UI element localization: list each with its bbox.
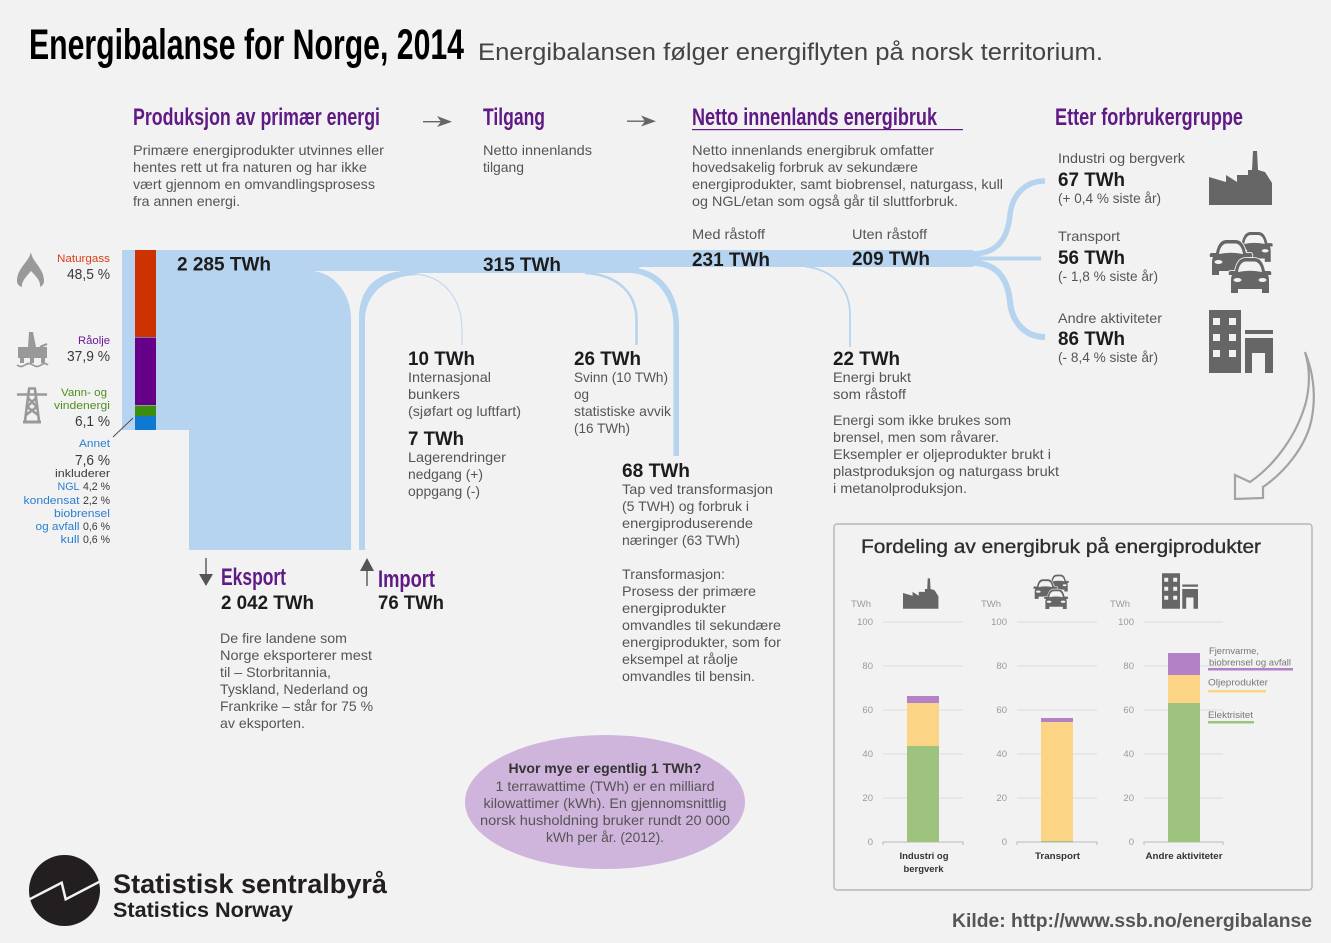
chart: industry: 60 <box>862 705 873 716</box>
flow values on band: Med råstoff <box>692 226 765 242</box>
text block: transformation losses: Transformasjon: <box>622 566 725 582</box>
panel: export: Norge eksporterer mest <box>220 647 372 663</box>
text block: losses and statistical differences: Svinn (10 TWh) <box>574 369 668 385</box>
panel: import: Import <box>378 566 435 593</box>
arrow: production to supply <box>423 116 452 127</box>
text block: raw material use: Energi som ikke brukes som <box>833 412 1011 428</box>
text block: transformation losses <box>622 460 781 684</box>
labels: energy sources: 7,6 % <box>75 453 110 469</box>
chart: transport: TWh <box>981 599 1001 610</box>
sankey flow diagram <box>122 181 1045 550</box>
panel: net domestic energy use heading and text: Netto innenlands energibruk <box>692 104 937 131</box>
text block: raw material use: Energi brukt <box>833 369 911 385</box>
consumer group: industry <box>1058 150 1186 206</box>
callout: what is 1 TWh: kilowattimer (kWh). En gjennomsnittlig <box>484 795 726 811</box>
panel: production heading and text: fra annen energi. <box>133 193 240 209</box>
consumer group: industry: Industri og bergverk <box>1058 150 1186 166</box>
panel: import: 76 TWh <box>378 592 444 614</box>
chart: other activities: Andre aktiviteter <box>1146 851 1223 862</box>
flow values on band: 315 TWh <box>483 254 561 276</box>
text block: transformation losses: omvandles til sekundære <box>622 617 781 633</box>
chart: other activities: 80 <box>1123 661 1134 672</box>
panel: export <box>199 558 373 731</box>
panel: supply heading and text: tilgang <box>483 159 524 175</box>
text block: international bunkers and stock changes <box>408 348 521 499</box>
consumer group: transport: (- 1,8 % siste år) <box>1058 268 1158 284</box>
text block: raw material use: som råstoff <box>833 386 906 402</box>
logo: Statistics Norway: Statistics Norway <box>113 899 293 922</box>
panel: export: Tyskland, Nederland og <box>220 681 368 697</box>
consumer group: transport: Transport <box>1058 228 1120 244</box>
labels: energy sources: 48,5 % <box>67 267 110 283</box>
labels: energy sources: Råolje <box>78 335 110 347</box>
text block: international bunkers and stock changes: 7 TWh <box>408 428 464 450</box>
chart: industry: 20 <box>862 793 873 804</box>
chart: industry: 40 <box>862 749 873 760</box>
chart: other activities: 60 <box>1123 705 1134 716</box>
text block: transformation losses: næringer (63 TWh) <box>622 532 740 548</box>
chart: transport: 60 <box>996 705 1007 716</box>
panel: export: 2 042 TWh <box>221 592 314 614</box>
panel: import <box>360 558 444 614</box>
panel: net domestic energy use heading and text: og NGL/etan som også går til sluttforbruk. <box>692 193 958 209</box>
labels: energy sources: NGL <box>58 481 80 493</box>
icon: flame <box>17 252 44 287</box>
labels: energy sources: 0,6 % <box>83 521 110 533</box>
chart: industry: 100 <box>857 617 873 628</box>
chart title: Fordeling av energibruk på energiprodukter <box>861 536 1262 558</box>
chart: transport: Transport <box>1035 851 1081 862</box>
chart: industry: TWh <box>851 599 871 610</box>
panel: supply heading and text: Netto innenlands <box>483 142 592 158</box>
chart legend: Elektrisitet <box>1208 710 1253 721</box>
icon: cars <box>1210 232 1273 293</box>
title: Energibalanse for Norge, 2014 <box>29 21 464 69</box>
flow values on band <box>177 226 930 276</box>
logo: Statistics Norway: Statistisk sentralbyrå <box>113 869 388 899</box>
text block: international bunkers and stock changes: (sjøfart og luftfart) <box>408 403 521 419</box>
chart: industry: Industri og <box>900 851 949 862</box>
text block: losses and statistical differences: statistiske avvik <box>574 403 672 419</box>
text block: losses and statistical differences: og <box>574 386 589 402</box>
text block: raw material use: plastproduksjon og naturgass brukt <box>833 463 1059 479</box>
logo: Statistics Norway <box>29 855 388 926</box>
panel: net domestic energy use heading and text: Netto innenlands energibruk omfatter <box>692 142 934 158</box>
panel: net domestic energy use heading and text: energiprodukter, samt biobrensel, naturgass, kull <box>692 176 1003 192</box>
labels: energy sources: 37,9 % <box>67 349 110 365</box>
labels: energy sources: 0,6 % <box>83 534 110 546</box>
consumer group: industry: 67 TWh <box>1058 169 1125 191</box>
heading: by consumer group: Etter forbrukergruppe <box>1055 104 1243 131</box>
panel: export: Frankrike – står for 75 % <box>220 698 373 714</box>
chart legend: biobrensel og avfall <box>1209 658 1291 668</box>
text block: raw material use: 22 TWh <box>833 348 900 370</box>
panel: production heading and text <box>133 104 384 209</box>
text block: losses and statistical differences: (16 TWh) <box>574 420 630 436</box>
text block: transformation losses: Prosess der primære <box>622 583 756 599</box>
text block: raw material use <box>833 348 1059 496</box>
callout: what is 1 TWh: norsk husholdning bruker rundt 20 000 <box>480 812 730 828</box>
labels: energy sources: inkluderer <box>55 468 110 480</box>
text block: losses and statistical differences <box>574 348 672 436</box>
text block: transformation losses: eksempel at råolje <box>622 651 738 667</box>
panel: production heading and text: hentes rett ut fra naturen og har ikke <box>133 159 367 175</box>
chart: transport: 0 <box>1002 837 1007 848</box>
text block: losses and statistical differences: 26 TWh <box>574 348 641 370</box>
chart: industry: 0 <box>868 837 873 848</box>
panel: production heading and text: Primære energiprodukter utvinnes eller <box>133 142 384 158</box>
source line: Kilde: http://www.ssb.no/energibalanse <box>952 911 1312 932</box>
consumer group: industry: (+ 0,4 % siste år) <box>1058 190 1161 206</box>
labels: energy sources: 4,2 % <box>83 481 110 493</box>
chart: other activities <box>1110 573 1223 862</box>
labels: energy sources: vindenergi <box>54 400 110 412</box>
panel: supply heading and text <box>483 104 592 175</box>
chart: other activities: 100 <box>1118 617 1134 628</box>
text block: transformation losses: (5 TWH) og forbruk i <box>622 498 749 514</box>
labels: energy sources: biobrensel <box>54 508 110 520</box>
labels: energy sources: Vann- og <box>61 387 107 399</box>
panel: net domestic energy use heading and text <box>692 104 1003 209</box>
labels: energy sources: og avfall <box>36 521 80 533</box>
callout: what is 1 TWh: 1 terrawattime (TWh) er en milliard <box>496 778 714 794</box>
consumer group: other activities: (- 8,4 % siste år) <box>1058 349 1158 365</box>
text block: transformation losses: 68 TWh <box>622 460 690 482</box>
chart: other activities: 40 <box>1123 749 1134 760</box>
text block: raw material use: Eksempler er oljeprodukter brukt i <box>833 446 1051 462</box>
text block: international bunkers and stock changes: Internasjonal <box>408 369 491 385</box>
arrow: supply to net use <box>627 116 656 126</box>
text block: raw material use: i metanolproduksjon. <box>833 480 967 496</box>
panel: production heading and text: Produksjon av primær energi <box>133 104 380 131</box>
consumer group: other activities <box>1058 310 1162 365</box>
chart: transport: 20 <box>996 793 1007 804</box>
stacked bar: primary energy sources <box>135 250 156 430</box>
callout: what is 1 TWh: kWh per år. (2012). <box>546 829 664 845</box>
chart: other activities: 0 <box>1129 837 1134 848</box>
callout: what is 1 TWh: Hvor mye er egentlig 1 TWh? <box>508 761 702 776</box>
text block: transformation losses: energiprodukter <box>622 600 726 616</box>
flow values on band: 209 TWh <box>852 248 930 270</box>
labels: energy sources <box>24 253 111 546</box>
panel: export: De fire landene som <box>220 630 347 646</box>
chart legend <box>1208 646 1293 724</box>
text block: transformation losses: omvandles til bensin. <box>622 668 755 684</box>
chart: industry <box>851 578 963 875</box>
leader line: annet <box>113 418 133 437</box>
callout: what is 1 TWh <box>465 735 745 869</box>
chart legend: Fjernvarme, <box>1209 646 1259 657</box>
labels: energy sources: Naturgass <box>57 253 111 265</box>
labels: energy sources: 2,2 % <box>83 495 110 507</box>
labels: energy sources: 6,1 % <box>75 414 110 430</box>
flow values on band: 2 285 TWh <box>177 254 271 276</box>
chart: transport: 40 <box>996 749 1007 760</box>
icon: factory <box>1209 151 1272 205</box>
panel: net domestic energy use heading and text: hovedsakelig forbruk av sekundære <box>692 159 918 175</box>
consumer group: transport <box>1058 228 1158 284</box>
chart: industry: bergverk <box>904 864 944 875</box>
consumer group: transport: 56 TWh <box>1058 247 1125 269</box>
chart: transport: 100 <box>991 617 1007 628</box>
text block: transformation losses: energiprodukter, som for <box>622 634 781 650</box>
text block: transformation losses: Tap ved transformasjon <box>622 481 773 497</box>
chart: transport <box>981 575 1097 862</box>
text block: international bunkers and stock changes: 10 TWh <box>408 348 475 370</box>
panel: supply heading and text: Tilgang <box>483 104 545 131</box>
arrow: curved to chart panel <box>1235 352 1314 499</box>
consumer group: other activities: 86 TWh <box>1058 328 1125 350</box>
chart legend: Oljeprodukter <box>1208 678 1268 688</box>
icon: power pylon <box>17 388 47 422</box>
panel: production heading and text: vært gjennom en omvandlingsprosess <box>133 176 375 192</box>
subtitle: Energibalansen følger energiflyten på norsk territorium. <box>478 39 1103 66</box>
flow values on band: 231 TWh <box>692 249 770 271</box>
text block: international bunkers and stock changes: Lagerendringer <box>408 449 506 465</box>
panel: export: til – Storbritannia, <box>220 664 331 680</box>
text block: international bunkers and stock changes: nedgang (+) <box>408 466 483 482</box>
icon: buildings <box>1209 310 1273 373</box>
chart: transport: 80 <box>996 661 1007 672</box>
panel: energy products chart <box>834 524 1312 890</box>
consumer group: other activities: Andre aktiviteter <box>1058 310 1162 326</box>
text block: international bunkers and stock changes: bunkers <box>408 386 460 402</box>
panel: export: av eksporten. <box>220 715 305 731</box>
text block: raw material use: brensel, men som råvarer. <box>833 429 999 445</box>
icon: oil platform <box>17 332 48 366</box>
chart: industry: 80 <box>862 661 873 672</box>
labels: energy sources: kondensat <box>24 495 80 507</box>
text block: international bunkers and stock changes: oppgang (-) <box>408 483 480 499</box>
labels: energy sources: Annet <box>79 438 110 450</box>
panel: export: Eksport <box>221 564 286 591</box>
chart: other activities: TWh <box>1110 599 1130 610</box>
text block: transformation losses: energiproduserende <box>622 515 753 531</box>
flow values on band: Uten råstoff <box>852 226 927 242</box>
labels: energy sources: kull <box>60 534 80 546</box>
chart: other activities: 20 <box>1123 793 1134 804</box>
